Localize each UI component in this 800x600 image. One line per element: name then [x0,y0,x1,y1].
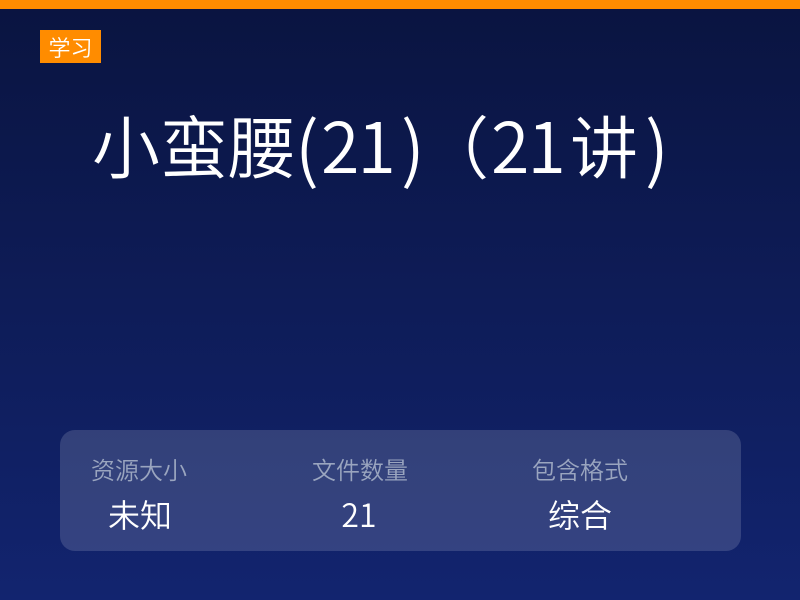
title: ) [401,91,425,196]
top accent bar [0,0,800,9]
label: file count: 文件数量 [312,451,408,486]
value: file count: 21 [341,491,377,537]
category tag: 学习 [48,31,92,63]
title: （ [421,94,489,193]
title: 讲 [570,94,638,193]
title: 小蛮腰 [92,94,296,193]
title: ( [295,91,319,196]
title: 21 [491,93,564,194]
panel: resource info [60,430,741,551]
title [92,91,669,196]
title: ) [645,91,669,196]
label: included formats: 包含格式 [532,451,628,486]
value: resource size: 未知 [108,491,172,537]
title: 21 [321,93,394,194]
value: included formats: 综合 [548,491,612,537]
label: resource size: 资源大小 [91,451,187,486]
category tag [40,30,101,63]
